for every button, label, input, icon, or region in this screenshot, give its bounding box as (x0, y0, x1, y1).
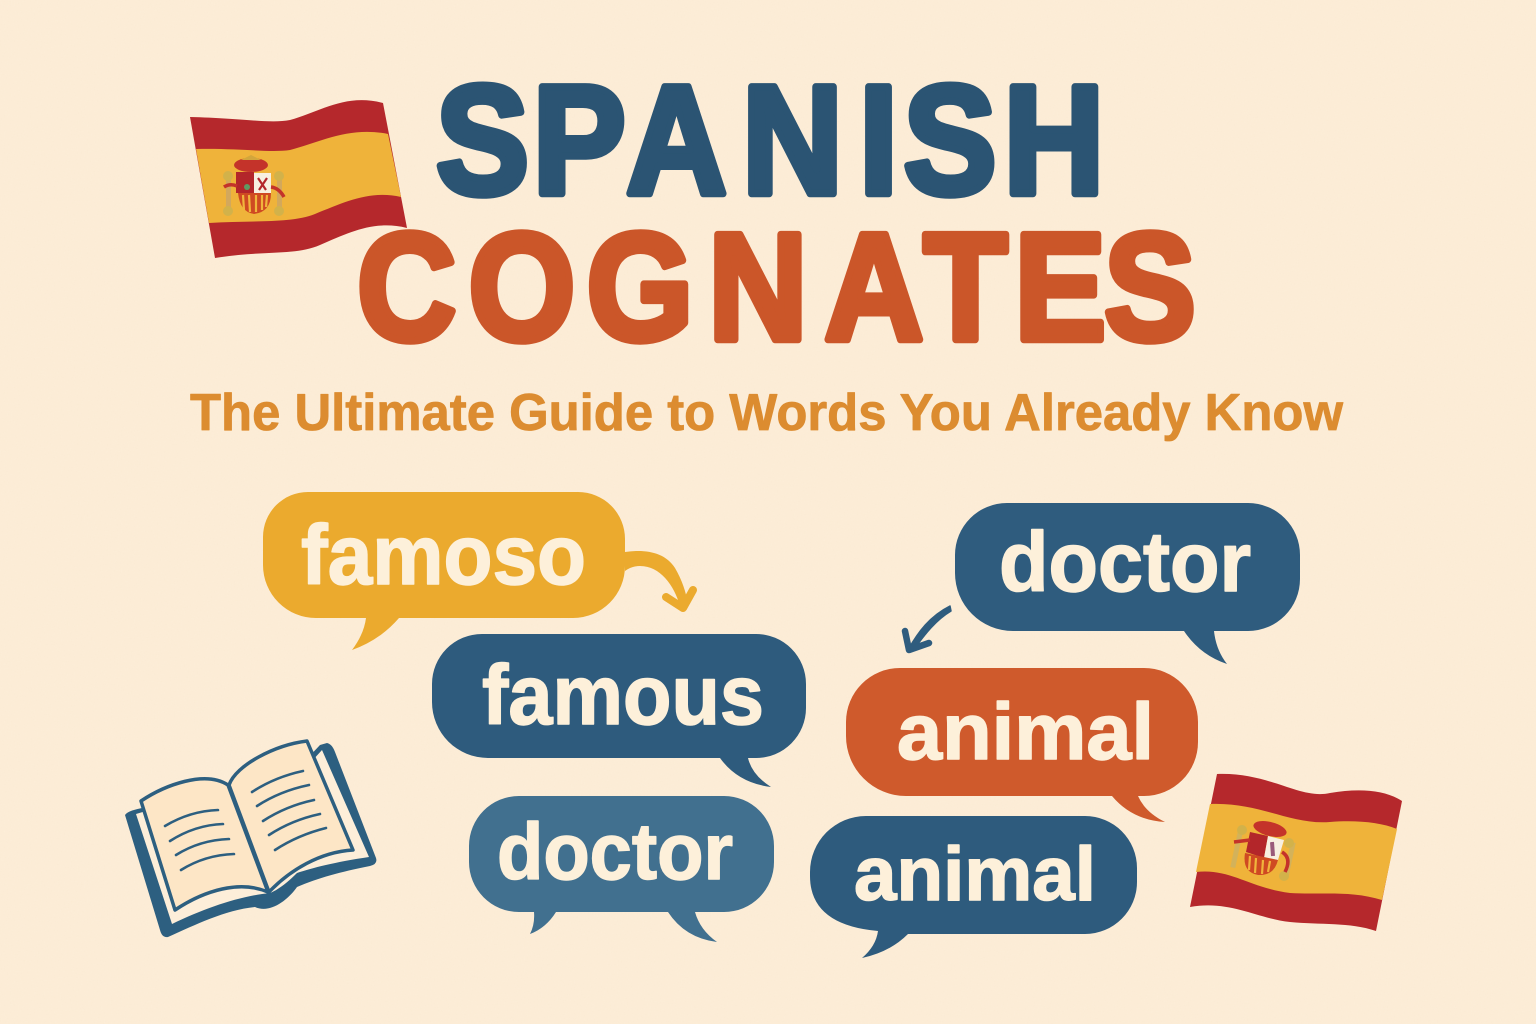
speech bubble: animal orange: animal (897, 687, 1154, 776)
icon: coat of arms top left flag (223, 155, 284, 216)
title: SPANISH: SPANISH (436, 55, 1104, 227)
speech bubble: doctor upper: doctor (999, 515, 1251, 609)
arrow: famoso to famous (625, 551, 693, 608)
speech bubble: animal orange (846, 668, 1198, 822)
subtitle: The Ultimate Guide to Words You Already Know (190, 384, 1344, 442)
speech bubble: animal navy (810, 816, 1137, 958)
speech bubble: doctor lower (469, 796, 774, 942)
speech bubble: famoso (263, 492, 625, 650)
speech bubble: doctor upper (955, 503, 1300, 664)
speech bubble: doctor lower: doctor (497, 807, 733, 896)
book text lines (165, 771, 326, 870)
title: COGNATES: COGNATES (357, 202, 1196, 372)
arrow: doctor to animal (905, 606, 951, 650)
icon: Spanish flag top left (190, 100, 407, 258)
icon: coat of arms bottom right flag (1230, 818, 1296, 881)
speech bubble: animal navy: animal (854, 832, 1096, 917)
icon: Spanish flag bottom right (1190, 774, 1402, 931)
speech bubble: famoso: famoso (301, 508, 586, 602)
speech bubble: famous (432, 634, 806, 787)
icon: open book (125, 741, 376, 937)
speech bubble: famous: famous (482, 648, 764, 742)
